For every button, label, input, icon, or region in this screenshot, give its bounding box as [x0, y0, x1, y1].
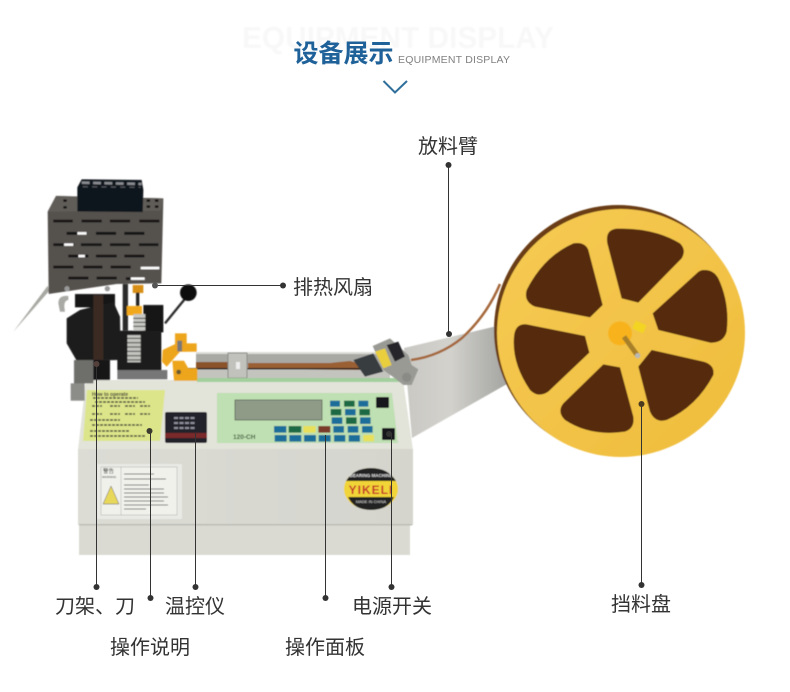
- machine top panel: [78, 380, 413, 450]
- tape roll back of reel: [494, 205, 742, 455]
- ghost background heading: EQUIPMENT DISPLAY: [242, 20, 554, 55]
- callout: 刀架、刀: [55, 361, 135, 618]
- callout: 电源开关: 电源开关: [352, 595, 432, 618]
- left needle plate: [13, 286, 49, 332]
- icon: chevron down: [384, 81, 407, 92]
- callout: 放料臂: 放料臂: [418, 135, 478, 158]
- bench with tape: [188, 352, 403, 382]
- power switches: [376, 397, 395, 440]
- title: 设备展示: [294, 34, 394, 70]
- clamp body: [58, 294, 121, 401]
- warning sticker: WARNING: [102, 475, 117, 479]
- panel model text: 120-CH: [233, 434, 256, 441]
- lever handle: [165, 284, 197, 323]
- header: [242, 20, 554, 92]
- callout: 电源开关: [352, 431, 432, 618]
- YIKELI badge: [344, 468, 398, 510]
- callout: 排热风扇: 排热风扇: [293, 276, 373, 299]
- YIKELI badge: BEARING MACHINE: [349, 473, 393, 478]
- warning sticker: 警告: [103, 467, 115, 475]
- tape sensor clamp: [353, 338, 418, 385]
- spring assembly: [117, 284, 167, 379]
- yellow reel with spokes: [497, 209, 745, 457]
- tape feeding to cutter: [411, 284, 500, 360]
- machine front lower: [79, 525, 410, 555]
- YIKELI badge: MADE IN CHINA: [356, 499, 386, 504]
- machine front upper: [78, 449, 413, 525]
- operation instruction label: How to operate: [92, 392, 128, 398]
- reel hub and bolt: [608, 321, 647, 358]
- callout: 操作面板: 操作面板: [285, 636, 365, 659]
- keypad: [274, 401, 374, 442]
- warning sticker: [97, 464, 182, 519]
- callout: 操作说明: 操作说明: [110, 636, 190, 659]
- callout: 放料臂: [418, 135, 478, 337]
- callout: 操作面板: [285, 435, 365, 659]
- fan: [77, 179, 143, 212]
- callout: 操作说明: [110, 428, 190, 659]
- YIKELI badge: YIKELI: [349, 483, 393, 497]
- operation instruction label: [83, 390, 165, 441]
- callout: 排热风扇: [152, 276, 373, 299]
- callout: 温控仪: 温控仪: [165, 595, 225, 618]
- reel support arm: [404, 326, 507, 438]
- callout: 温控仪: [165, 433, 225, 618]
- subtitle: EQUIPMENT DISPLAY: [398, 54, 510, 66]
- perforated cage: [48, 196, 163, 294]
- control panel: [217, 393, 398, 443]
- callout: 挡料盘: [611, 401, 671, 616]
- LCD display: [235, 400, 322, 420]
- callout: 刀架、刀: 刀架、刀: [55, 595, 135, 618]
- cutter head: [13, 179, 197, 401]
- machine: [13, 179, 745, 555]
- callout: 挡料盘: 挡料盘: [611, 593, 671, 616]
- yellow tape guides: [162, 333, 197, 381]
- temperature controller: [165, 412, 207, 443]
